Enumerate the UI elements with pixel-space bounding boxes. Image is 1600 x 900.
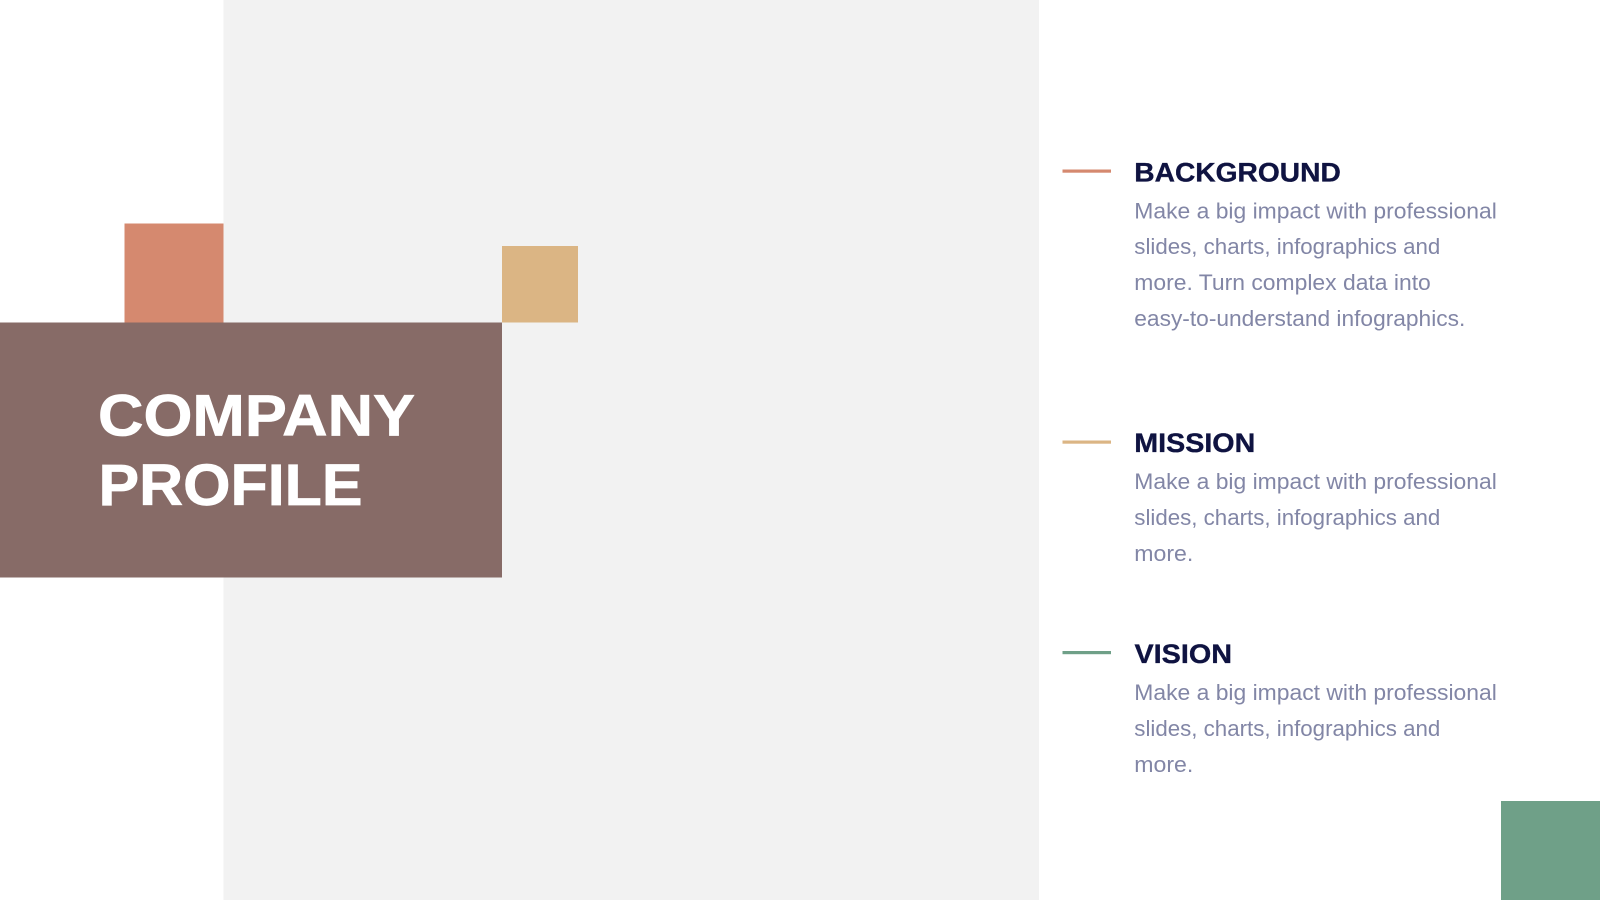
text block: background: Make a big impact with professional (1134, 198, 1497, 223)
text block: vision: more. (1134, 752, 1193, 777)
text block: mission: slides, charts, infographics and (1134, 505, 1440, 530)
title panel (0, 322, 502, 578)
square: orange accent (124, 224, 224, 322)
text block: background: easy-to-understand infographics. (1134, 306, 1465, 331)
background panel: grey (224, 0, 1039, 900)
text block: vision: slides, charts, infographics and (1134, 716, 1440, 741)
title: COMPANY (98, 384, 415, 449)
square: tan accent (502, 246, 578, 322)
section: vision (1062, 639, 1497, 777)
marker line: background (1062, 170, 1111, 173)
section: mission (1062, 428, 1497, 566)
marker line: mission (1062, 440, 1111, 444)
heading: background: BACKGROUND (1134, 157, 1341, 187)
title (98, 384, 415, 518)
square: green accent (1501, 801, 1600, 900)
text block: mission: more. (1134, 541, 1193, 566)
text block: background: slides, charts, infographics and (1134, 234, 1440, 259)
text block: mission: Make a big impact with professional (1134, 469, 1497, 494)
heading: vision: VISION (1134, 639, 1232, 669)
text block: vision (1134, 680, 1497, 777)
text block: background: more. Turn complex data into (1134, 270, 1431, 295)
text block: vision: Make a big impact with professional (1134, 680, 1497, 705)
marker line: vision (1062, 651, 1111, 654)
text block: mission (1134, 469, 1497, 566)
section: background (1062, 157, 1497, 331)
title: PROFILE (98, 453, 362, 518)
text block: background (1134, 198, 1497, 331)
heading: mission: MISSION (1134, 428, 1255, 458)
